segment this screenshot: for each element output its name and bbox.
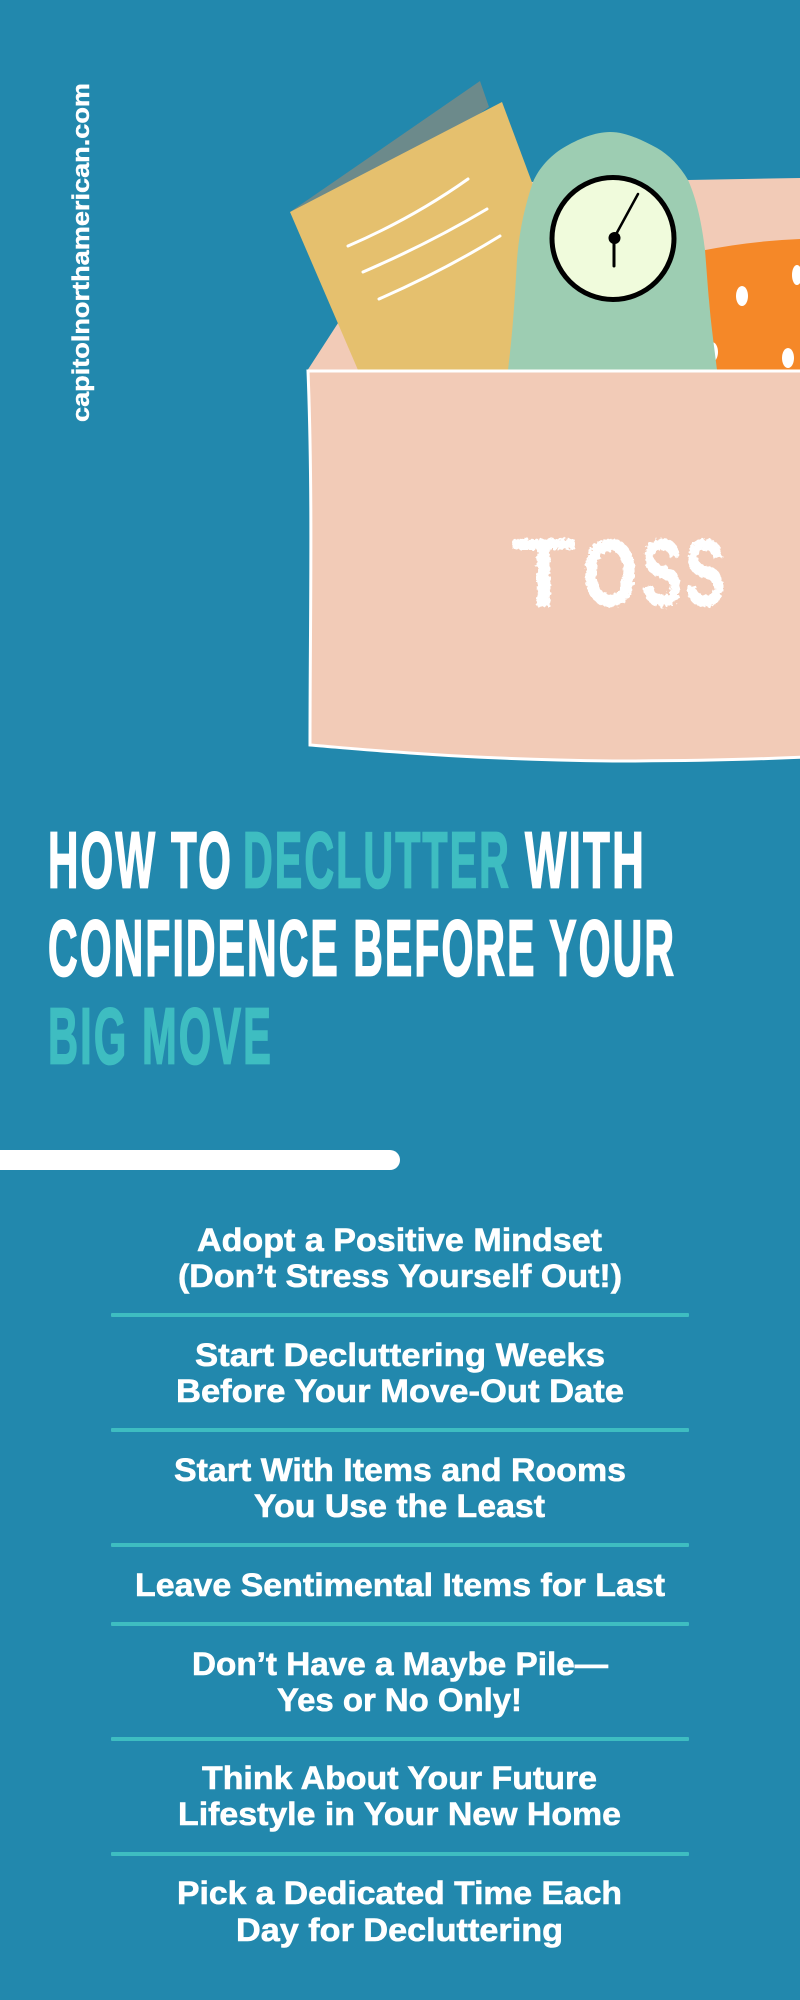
illustration: box with items <box>290 81 800 761</box>
box label: toss: S <box>642 520 682 625</box>
box back flap <box>307 178 800 371</box>
tip 7 <box>177 1875 622 1948</box>
tip 3 <box>174 1452 626 1524</box>
box label: toss: T <box>512 520 575 625</box>
tip 5: Yes or No Only! <box>277 1682 522 1718</box>
title <box>48 816 676 1080</box>
website url: capitolnorthamerican.com <box>68 83 95 422</box>
title: BIG MOVE <box>48 992 273 1080</box>
tip 2 <box>176 1337 624 1409</box>
icon: orange polka-dot item <box>700 239 800 371</box>
tip 1 <box>178 1222 622 1294</box>
tip 2: Start Decluttering Weeks <box>195 1337 605 1373</box>
tip 4: Leave Sentimental Items for Last <box>135 1567 665 1603</box>
tip 6: Think About Your Future <box>202 1760 597 1796</box>
tip 1: (Don’t Stress Yourself Out!) <box>178 1258 622 1294</box>
title: DECLUTTER <box>243 816 511 904</box>
title: HOW TO <box>48 816 233 904</box>
box label: toss: O <box>583 520 637 625</box>
white accent bar <box>0 1150 400 1170</box>
tip 5: Don’t Have a Maybe Pile— <box>192 1646 608 1682</box>
tip 7: Day for Decluttering <box>236 1912 563 1948</box>
tip 3: Start With Items and Rooms <box>174 1452 626 1488</box>
tip 6: Lifestyle in Your New Home <box>178 1796 621 1832</box>
tip 2: Before Your Move-Out Date <box>176 1373 624 1409</box>
box front panel <box>308 371 800 761</box>
tip 1: Adopt a Positive Mindset <box>197 1222 602 1258</box>
icon: book <box>290 81 546 370</box>
tip 3: You Use the Least <box>254 1488 545 1524</box>
tip 7: Pick a Dedicated Time Each <box>177 1875 622 1911</box>
title: WITH <box>525 816 646 904</box>
icon: mantel clock <box>508 132 717 370</box>
box label: toss <box>512 520 725 625</box>
list of tips <box>111 1222 689 1948</box>
tip 6 <box>178 1760 621 1832</box>
box label: toss: S <box>685 520 725 625</box>
tip 5 <box>192 1646 608 1718</box>
